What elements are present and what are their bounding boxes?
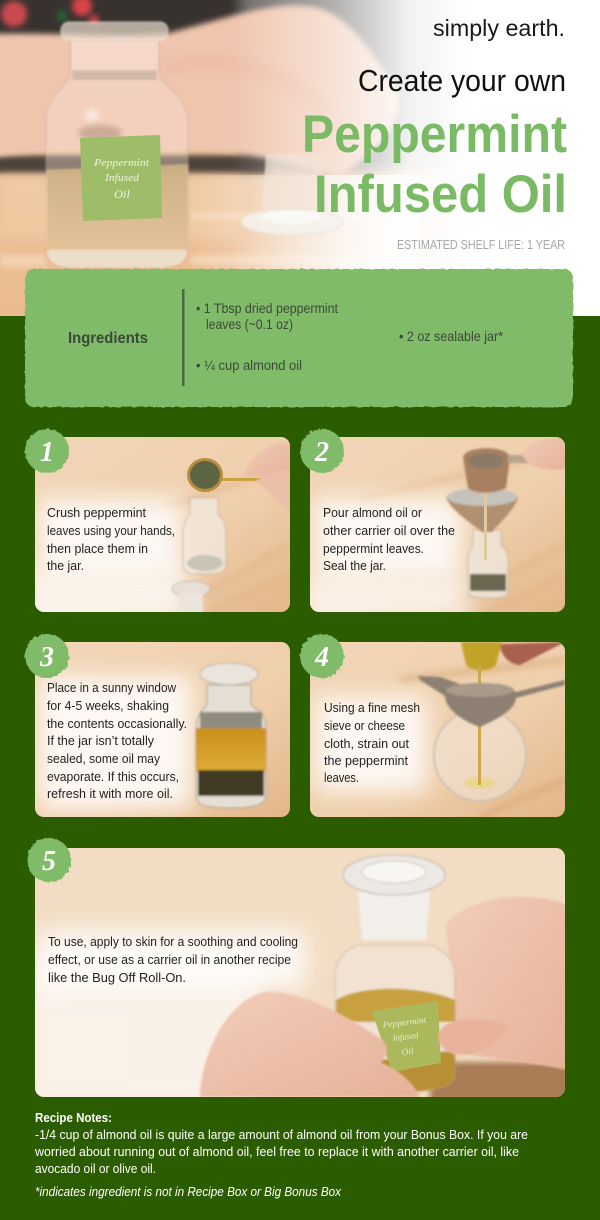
recipe notes bbox=[34, 1110, 528, 1176]
step 4 text: the peppermint bbox=[324, 753, 408, 768]
logo: simply earth: simply earth. bbox=[433, 15, 565, 41]
jar label: Peppermint bbox=[93, 157, 150, 169]
step 3 text: refresh it with more oil. bbox=[47, 786, 173, 801]
photo: jar with leaves bbox=[468, 530, 508, 598]
panel: step 2 bbox=[310, 437, 565, 612]
title block: Create your own bbox=[358, 63, 566, 98]
photo: mesh sieve bbox=[418, 676, 565, 727]
step 3 text bbox=[47, 680, 187, 801]
step 3 text: for 4-5 weeks, shaking bbox=[47, 698, 169, 713]
recipe notes: Recipe Notes: bbox=[35, 1110, 112, 1125]
photo: measuring spoon with leaves bbox=[187, 458, 262, 492]
badge: 4: 4 bbox=[314, 642, 329, 673]
photo: label on the jar: Peppermint bbox=[381, 1015, 427, 1030]
photo: hand and pouring bottle bbox=[461, 642, 565, 670]
ingredients divider bbox=[182, 289, 184, 386]
photo: label on the jar: Oil bbox=[401, 1046, 415, 1057]
step 3 text: If the jar isn’t totally bbox=[47, 733, 154, 748]
footnote: *indicates ingredient is not in Recipe Box or Big Bonus Box bbox=[35, 1184, 341, 1199]
step 4 text: leaves. bbox=[324, 770, 359, 785]
step 1 text bbox=[47, 505, 175, 573]
panel: step 5 bbox=[20, 848, 570, 1110]
ingredient: peppermint: • 1 Tbsp dried peppermint bbox=[196, 300, 338, 316]
badge: 1: 1 bbox=[40, 437, 54, 468]
panel: step 3 bbox=[35, 642, 290, 817]
panel: step 4 bbox=[310, 642, 565, 817]
photo: right hand bbox=[445, 897, 567, 1070]
jar label bbox=[80, 135, 162, 221]
title block bbox=[302, 63, 567, 224]
photo: metal cup bbox=[463, 448, 528, 492]
step 2 text: peppermint leaves. bbox=[323, 541, 424, 556]
ingredient: almond oil: • ¼ cup almond oil bbox=[196, 357, 302, 373]
step 3 text: evaporate. If this occurs, bbox=[47, 769, 179, 784]
step 5 text bbox=[48, 934, 298, 985]
step 1 text: Crush peppermint bbox=[47, 505, 146, 520]
recipe notes: worried about running out of almond oil, feel free to replace it with another carrier oil, like bbox=[34, 1144, 519, 1159]
glass lid on the table bbox=[241, 154, 343, 235]
panel: step 1 bbox=[35, 437, 290, 612]
step 5 text: To use, apply to skin for a soothing and cooling bbox=[48, 934, 298, 949]
step 2 text bbox=[323, 505, 455, 573]
jar label: Oil bbox=[114, 187, 131, 201]
badge: 2 bbox=[300, 429, 344, 473]
jar label: Infused bbox=[104, 172, 140, 184]
title block: Infused Oil bbox=[314, 165, 567, 224]
recipe notes: avocado oil or olive oil. bbox=[35, 1161, 156, 1176]
badge: 4 bbox=[300, 634, 344, 678]
ingredients heading: Ingredients bbox=[68, 330, 148, 347]
ingredient: peppermint bbox=[196, 300, 338, 332]
photo: label on the jar bbox=[372, 1001, 441, 1072]
step 4 text: Using a fine mesh bbox=[324, 700, 420, 715]
badge: 5 bbox=[27, 838, 71, 882]
ingredient: jar: • 2 oz sealable jar* bbox=[399, 328, 503, 344]
step 5 text: like the Bug Off Roll-On. bbox=[48, 970, 186, 985]
hero jar with label bbox=[46, 22, 188, 268]
step 4 text: sieve or cheese bbox=[324, 718, 405, 733]
badge: 2: 2 bbox=[314, 437, 329, 468]
photo: label on the jar: Infused bbox=[391, 1030, 420, 1043]
hero photo: jar and hand on a table bbox=[0, 0, 600, 316]
step 4 text bbox=[324, 700, 420, 785]
step 1 text: leaves using your hands, bbox=[47, 523, 175, 538]
shelf life note: ESTIMATED SHELF LIFE: 1 YEAR bbox=[397, 237, 565, 252]
photo: open jar bbox=[183, 498, 226, 574]
step 5 text: effect, or use as a carrier oil in another recipe bbox=[48, 952, 291, 967]
step 2 text: Pour almond oil or bbox=[323, 505, 423, 520]
badge: 5: 5 bbox=[42, 846, 56, 877]
step 1 text: the jar. bbox=[47, 558, 84, 573]
photo: oil stream bbox=[478, 665, 481, 785]
step 2 text: Seal the jar. bbox=[323, 558, 386, 573]
photo: funnel bbox=[446, 488, 518, 532]
recipe notes: -1/4 cup of almond oil is quite a large amount of almond oil from your Bonus Box. If you are bbox=[35, 1127, 528, 1142]
photo: glass stopper bbox=[172, 581, 210, 614]
step 3 text: sealed, some oil may bbox=[47, 751, 160, 766]
step 4 text: cloth, strain out bbox=[324, 736, 409, 751]
hero fade bbox=[200, 0, 600, 316]
step 3 text: the contents occasionally. bbox=[47, 716, 187, 731]
title block: Peppermint bbox=[302, 105, 567, 164]
badge: 3 bbox=[25, 634, 69, 678]
photo: jar with oil and leaves bbox=[196, 663, 266, 808]
step 3 text: Place in a sunny window bbox=[47, 680, 177, 695]
photo: left hand bbox=[200, 992, 420, 1097]
badge: 3: 3 bbox=[39, 642, 54, 673]
step 1 text: then place them in bbox=[47, 541, 148, 556]
photo: oil stream bbox=[484, 490, 487, 560]
photo: glass round jar bbox=[434, 709, 526, 801]
ingredient: peppermint: leaves (~0.1 oz) bbox=[206, 316, 293, 332]
photo: hand bbox=[244, 442, 290, 510]
step 2 text: other carrier oil over the bbox=[323, 523, 455, 538]
panel: ingredients bbox=[25, 269, 573, 407]
badge: 1 bbox=[25, 429, 69, 473]
photo: hand bbox=[522, 437, 567, 470]
photo: jar with lid and oil bbox=[335, 855, 455, 1092]
photo: thumb bbox=[438, 1019, 510, 1055]
